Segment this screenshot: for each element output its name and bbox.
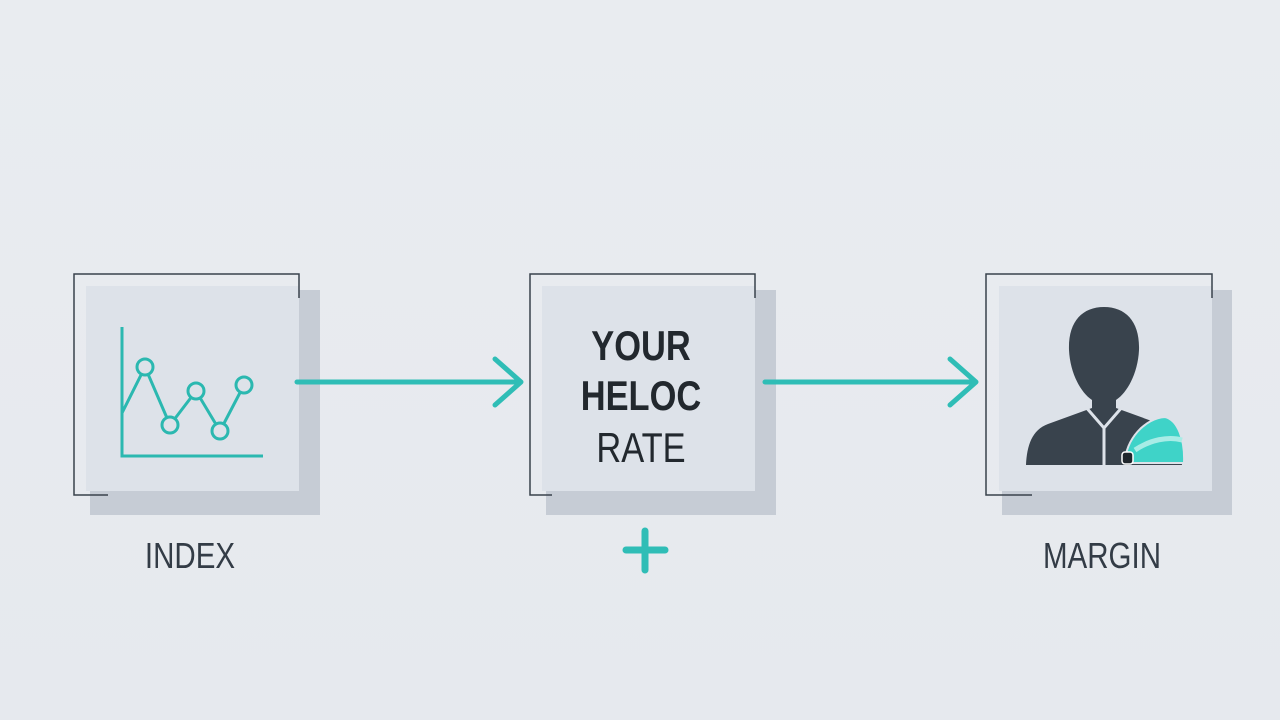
panel: margin card [986, 274, 1232, 515]
text: your heloc rate: HELOC [581, 373, 701, 420]
icon: teal helmet [1125, 417, 1184, 463]
label: margin: MARGIN [1043, 535, 1161, 576]
arrow: index to rate [297, 359, 521, 405]
panel: index card [74, 274, 320, 515]
arrow: rate to margin [765, 359, 976, 405]
panel: heloc rate card [530, 274, 776, 515]
text: your heloc rate: RATE [596, 425, 686, 472]
text: your heloc rate [581, 323, 701, 472]
icon: plus [626, 531, 665, 570]
label: index: INDEX [145, 535, 235, 576]
text: your heloc rate: YOUR [591, 323, 691, 370]
icon: person silhouette [1026, 307, 1184, 468]
icon: line chart [122, 327, 263, 456]
